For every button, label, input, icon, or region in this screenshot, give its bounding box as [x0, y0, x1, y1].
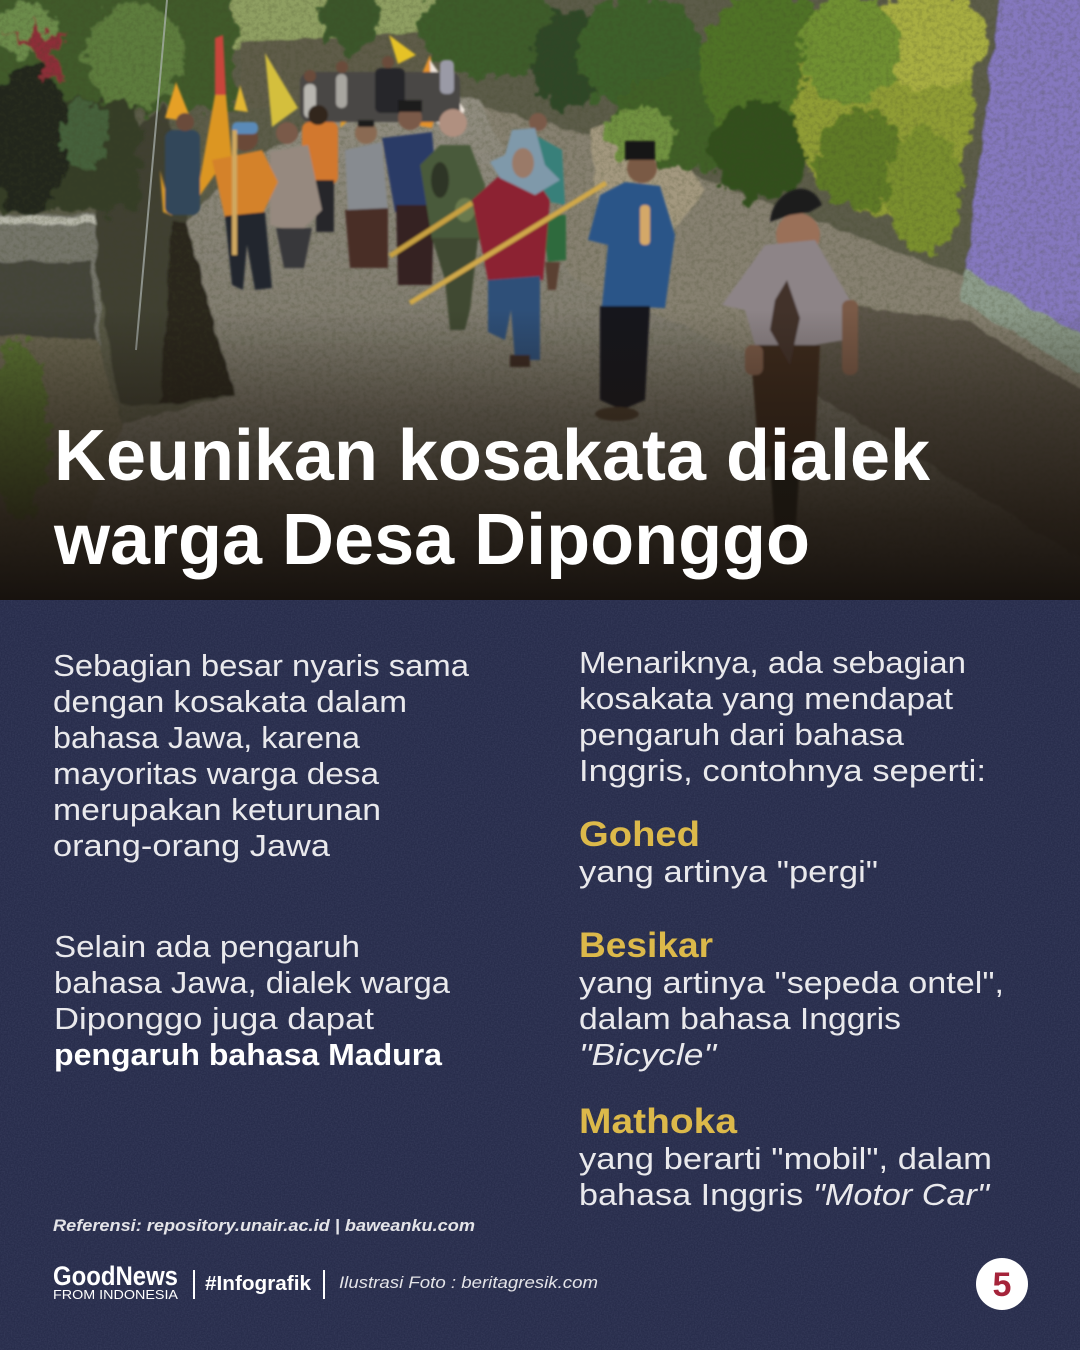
vocabulary: Mathoka: bahasa Inggris "Motor Car"	[579, 1177, 991, 1212]
text block: left paragraph 2: bahasa Jawa, dialek warga	[54, 965, 451, 1000]
vocabulary: Besikar: "Bicycle"	[579, 1037, 718, 1072]
footer: GoodNews from Indonesia logo: FROM INDONESIA	[53, 1287, 178, 1302]
photo: villagers marching on a village road	[0, 0, 1080, 640]
distant crowd	[300, 56, 460, 122]
marchers	[160, 35, 858, 540]
page number badge	[976, 1258, 1028, 1310]
flags	[160, 35, 465, 216]
text block: left paragraph 2	[54, 929, 451, 1072]
vocabulary: Gohed	[579, 815, 878, 889]
photo scenery: ground, road and walls	[0, 0, 1080, 550]
vocabulary: Gohed: yang artinya "pergi"	[579, 854, 878, 889]
vocabulary: Mathoka: Mathoka	[579, 1102, 738, 1141]
text block: right intro	[579, 645, 986, 788]
photo texture speckle	[0, 0, 1080, 424]
footer: photo credit: Ilustrasi Foto : beritagresik.com	[339, 1273, 598, 1292]
text block: right intro: kosakata yang mendapat	[579, 681, 953, 716]
red plant	[5, 18, 75, 80]
pipe along the channel	[136, 0, 167, 350]
page number badge: 5	[993, 1266, 1011, 1304]
text block: left paragraph 1: dengan kosakata dalam	[53, 684, 407, 719]
blue shirt man	[588, 141, 675, 421]
scarf man in red shirt	[472, 128, 560, 367]
text block: right intro: Menariknya, ada sebagian	[579, 645, 966, 680]
title	[53, 416, 931, 580]
background grain texture	[0, 600, 1080, 1350]
right stone wall	[486, 107, 1080, 389]
distant hill and fence	[228, 0, 437, 51]
vocabulary: Besikar	[579, 926, 1004, 1072]
footer: hashtag: #Infografik	[205, 1273, 312, 1295]
text block: left paragraph 1: bahasa Jawa, karena	[53, 720, 361, 755]
channel stone wall	[96, 103, 190, 405]
text block: left paragraph 1: Sebagian besar nyaris sama	[53, 648, 470, 683]
vocabulary: Mathoka	[579, 1102, 992, 1212]
crowd mid row	[165, 130, 200, 215]
text block: left paragraph 2: Diponggo juga dapat	[54, 1001, 374, 1036]
orange shirt man	[212, 122, 278, 290]
footer: GoodNews from Indonesia logo: GoodNews	[53, 1261, 178, 1291]
soldier	[420, 109, 485, 330]
text block: left paragraph 2: pengaruh bahasa Madura	[54, 1037, 443, 1072]
reference line: Referensi: repository.unair.ac.id | baweanku.com	[53, 1216, 475, 1235]
road	[110, 96, 950, 482]
vocabulary: Besikar: dalam bahasa Inggris	[579, 1001, 901, 1036]
far left ground	[0, 215, 100, 345]
vocabulary: Gohed: Gohed	[579, 815, 700, 854]
footer: GoodNews from Indonesia logo	[53, 1261, 178, 1302]
text block: right intro: pengaruh dari bahasa	[579, 717, 905, 752]
bamboo poles	[410, 183, 606, 303]
text block: left paragraph 1: merupakan keturunan	[53, 792, 381, 827]
text block: right intro: Inggris, contohnya seperti:	[579, 753, 986, 788]
vocabulary: Besikar: Besikar	[579, 926, 713, 965]
panel: navy text background	[0, 600, 1080, 1350]
vocabulary: Besikar: yang artinya "sepeda ontel",	[579, 965, 1004, 1000]
text block: left paragraph 2: Selain ada pengaruh	[54, 929, 360, 964]
vocabulary: Mathoka: yang berarti "mobil", dalam	[579, 1141, 992, 1176]
photo foliage	[0, 0, 988, 520]
dark gradient overlay	[0, 310, 1080, 600]
grey shirt man in sarong	[722, 189, 858, 540]
purple building wall	[966, 0, 1080, 345]
drainage trench	[160, 221, 234, 405]
title: warga Desa Diponggo	[53, 500, 810, 580]
text block: left paragraph 1: mayoritas warga desa	[53, 756, 380, 791]
title: Keunikan kosakata dialek	[54, 416, 931, 496]
text block: left paragraph 1: orang-orang Jawa	[53, 828, 331, 863]
man behind scarf man	[529, 113, 566, 290]
text block: left paragraph 1	[53, 648, 470, 863]
